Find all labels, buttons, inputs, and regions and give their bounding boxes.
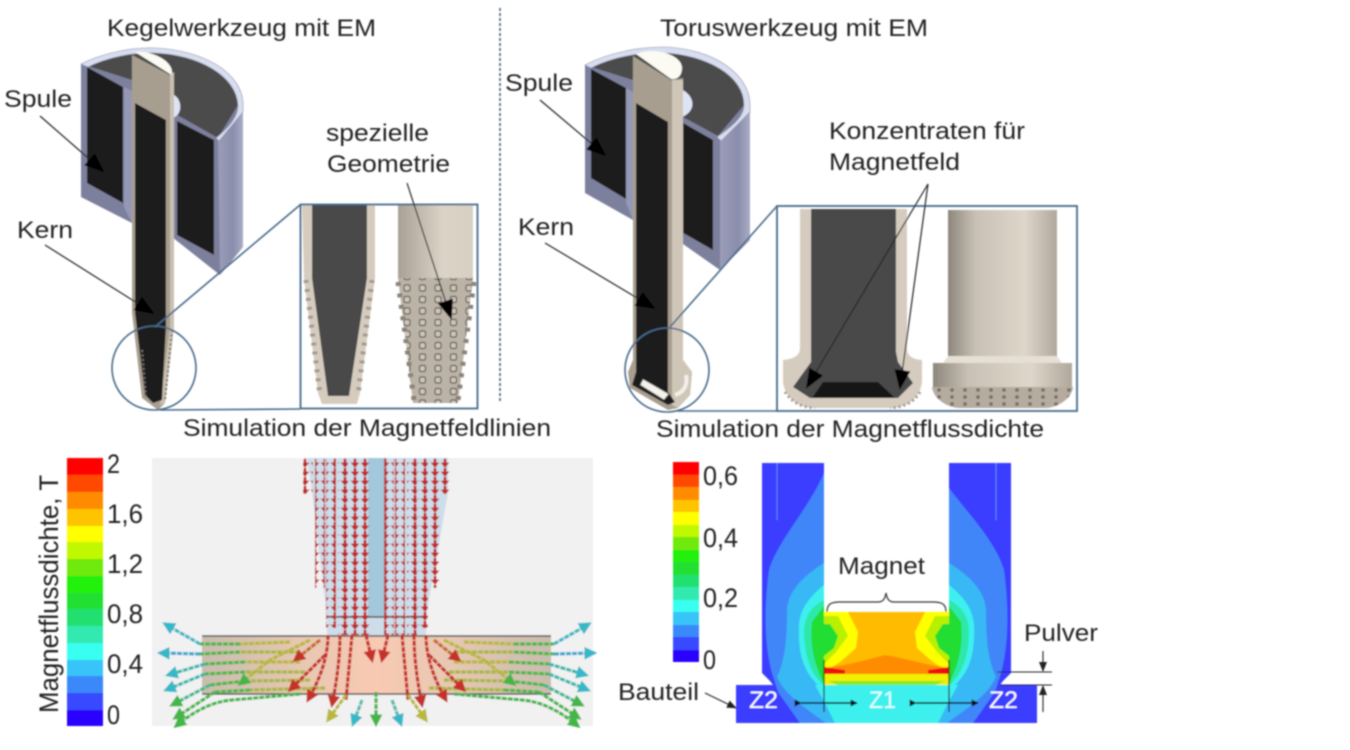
arrow: spezielle Geometrie <box>407 183 451 318</box>
inset frame <box>777 206 1077 411</box>
zone arrows <box>801 702 978 704</box>
magnet core <box>832 610 941 668</box>
contour field <box>736 463 1037 723</box>
legend values: 0 <box>703 645 716 675</box>
arrow: Kern left <box>45 245 153 313</box>
zone Z1 <box>815 685 958 723</box>
legend values: 0,4 <box>107 649 143 679</box>
label: Konzentraten für Magnetfeld: Magnetfeld <box>829 149 960 176</box>
arrow: Bauteil <box>705 693 736 708</box>
legend values: 0 <box>107 700 120 730</box>
chart: magnetic flux density simulation <box>736 463 1037 723</box>
zone labels: Z1 <box>869 687 896 714</box>
heading: Simulation der Magnetflussdichte: Simulation der Magnetflussdichte <box>656 416 1044 443</box>
magnet left contour <box>824 612 858 672</box>
heading: Simulation der Magnetfeldlinien: Simulation der Magnetfeldlinien <box>183 415 551 442</box>
label: Spule right: Spule <box>505 70 573 97</box>
arrow: Spule right <box>540 100 605 155</box>
label: spezielle Geometrie: Geometrie <box>327 151 450 178</box>
title: Kegelwerkzeug: Kegelwerkzeug mit EM <box>107 15 376 42</box>
panel: cone tool 3D section <box>81 48 300 410</box>
central flux arrow <box>374 692 378 724</box>
divider between tools <box>499 8 501 402</box>
plate outlines <box>202 617 551 694</box>
legend values: 0,4 <box>703 523 738 553</box>
panel: cone tool inset <box>300 204 478 408</box>
inset section <box>783 209 922 408</box>
arrow: Spule left <box>40 116 103 171</box>
left fan of flux arrows <box>160 624 372 726</box>
tool silhouette <box>307 458 448 635</box>
legend values: 0,2 <box>703 583 738 613</box>
label: spezielle Geometrie: spezielle <box>326 120 429 147</box>
brace: Magnet <box>827 593 946 612</box>
zone labels: Z2 <box>749 687 778 714</box>
panel: torus tool 3D section <box>585 47 777 412</box>
shaft with core <box>132 52 174 410</box>
shaft with flange and core <box>628 51 692 410</box>
legend: flux density colour bar <box>673 461 738 675</box>
coil housing <box>585 47 750 270</box>
inset exterior with dot pattern <box>398 205 474 403</box>
label: Kern right: Kern <box>518 214 574 241</box>
detail circle and zoom lines <box>112 205 300 410</box>
legend: field lines colour bar <box>67 449 143 730</box>
label: Kern left: Kern <box>17 217 73 244</box>
label: Pulver: Pulver <box>1024 620 1098 647</box>
arrows: Konzentraten <box>807 184 928 388</box>
legend values <box>107 449 143 730</box>
label: Magnet: Magnet <box>838 553 925 580</box>
zone dividers <box>824 660 949 712</box>
panel: torus tool inset <box>777 206 1077 411</box>
title: Toruswerkzeug: Toruswerkzeug mit EM <box>660 15 928 42</box>
zone labels <box>749 687 1018 714</box>
zone labels: Z2 <box>989 687 1018 714</box>
magnet right contour <box>915 612 949 672</box>
label: Spule left: Spule <box>4 86 72 113</box>
axis label: Magnetflussdichte, T: Magnetflussdichte, T <box>34 475 64 713</box>
mask: tool gap <box>824 463 949 612</box>
legend values: 1,6 <box>107 499 143 529</box>
label: Konzentraten für Magnetfeld <box>829 118 1025 176</box>
label: Konzentraten für Magnetfeld: Konzentraten für <box>829 118 1025 145</box>
label: spezielle Geometrie <box>326 120 450 178</box>
magnet lower bands <box>828 654 945 674</box>
legend values <box>703 461 738 675</box>
legend values: 0,8 <box>107 599 143 629</box>
inset exterior <box>932 210 1073 408</box>
right fan of flux arrows <box>382 624 594 726</box>
tool core <box>368 458 387 617</box>
vertical arrow columns <box>303 458 451 635</box>
legend values: 0,6 <box>703 461 738 491</box>
legend values: 1,2 <box>107 549 143 579</box>
chart: magnetic field line simulation <box>152 458 594 726</box>
detail circle and zoom lines <box>625 206 777 412</box>
label: Bauteil: Bauteil <box>618 679 699 706</box>
pole seams <box>777 463 996 520</box>
coil housing <box>81 48 243 275</box>
arrow: Kern right <box>545 243 654 308</box>
arrows: Pulver gap <box>997 651 1052 712</box>
inset section <box>302 205 375 404</box>
work plate <box>202 636 551 694</box>
inset frame <box>300 204 478 408</box>
legend values: 2 <box>107 449 120 479</box>
